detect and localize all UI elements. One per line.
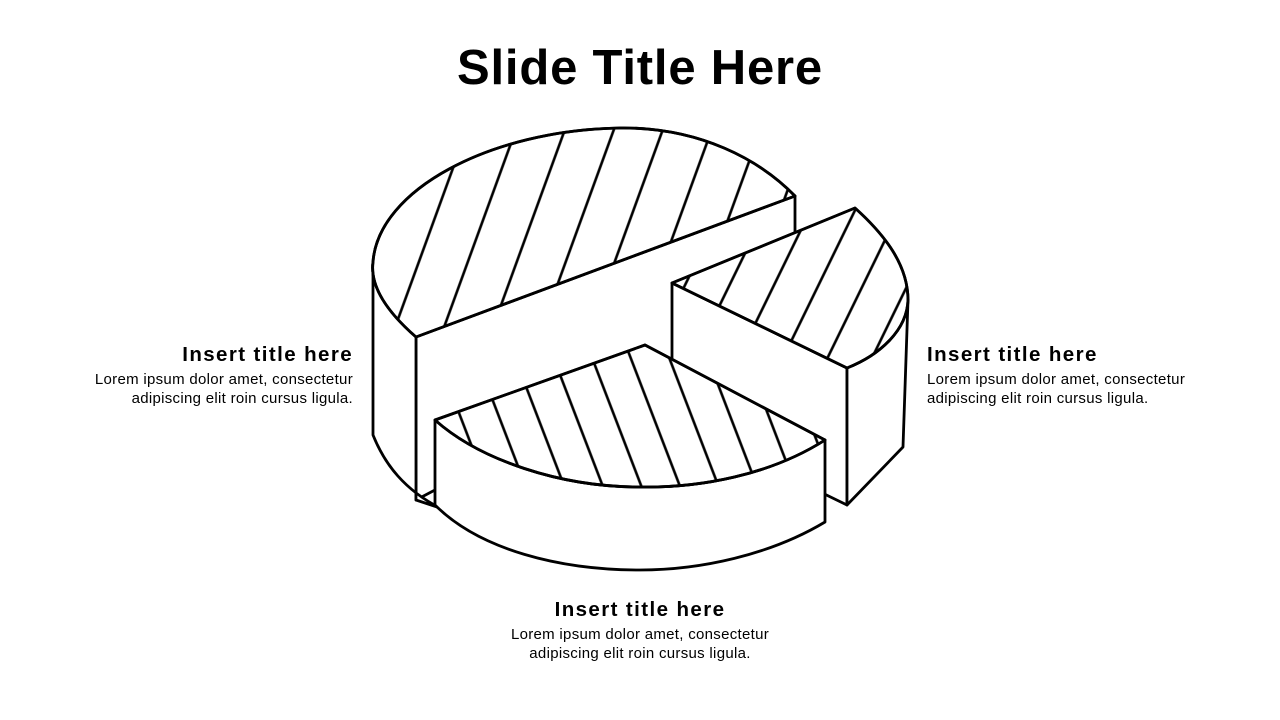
label: right: adipiscing elit roin cursus ligula. [927,390,1148,407]
label: left: Lorem ipsum dolor amet, consectetur [95,371,353,388]
label: left: Insert title here [182,343,353,366]
slice: bottom [435,345,825,570]
label: left [95,343,353,407]
label: right [927,343,1185,407]
label: bottom: Insert title here [555,598,725,621]
label: bottom [511,598,769,662]
label: bottom: Lorem ipsum dolor amet, consectetur [511,626,769,643]
label: bottom: adipiscing elit roin cursus ligula. [529,645,751,662]
slice: large [373,128,795,508]
label: right: Insert title here [927,343,1098,366]
label: left: adipiscing elit roin cursus ligula. [132,390,353,407]
slice: right [672,208,908,505]
title: Slide Title Here [457,41,823,95]
label: right: Lorem ipsum dolor amet, consectetur [927,371,1185,388]
